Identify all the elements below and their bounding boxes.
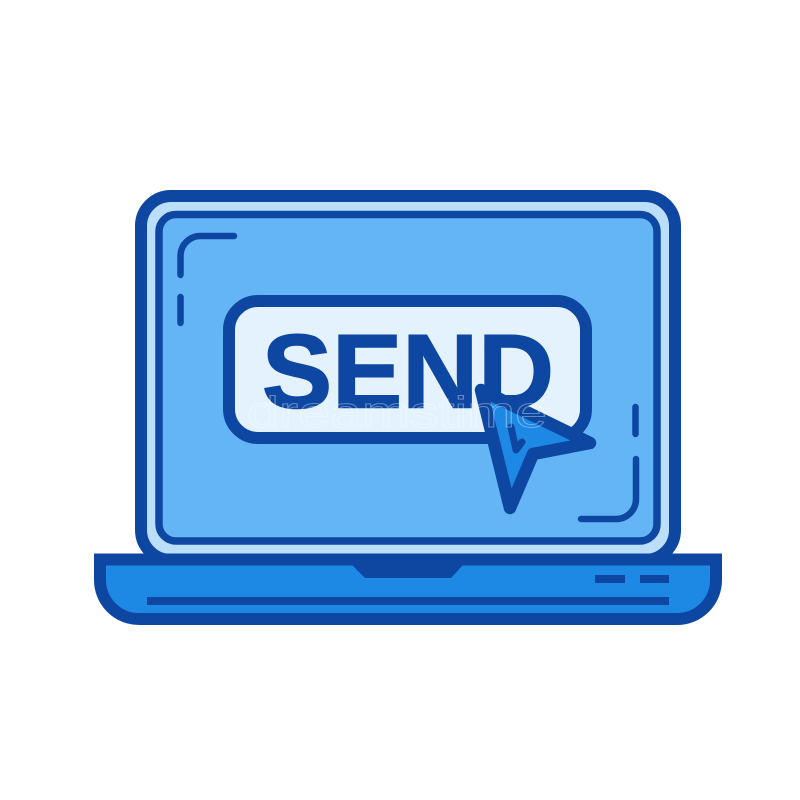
laptop lid [141,196,675,560]
indicator light left [595,575,625,583]
send button [229,301,586,438]
screen corner bracket: bottom right [581,407,636,519]
watermark: dreamstime [247,388,547,437]
button shape [229,301,586,438]
screen corner bracket: top left [180,236,234,323]
screen [159,214,657,541]
arrow tick mark [511,427,522,450]
lid frame [141,196,675,560]
button label: SEND [262,314,554,430]
laptop base [100,560,716,619]
base body [100,560,716,619]
cursor arrow [481,390,590,508]
front slot [147,597,669,605]
arrow body [481,390,590,508]
trackpad notch [352,565,463,578]
indicator light right [640,575,669,583]
